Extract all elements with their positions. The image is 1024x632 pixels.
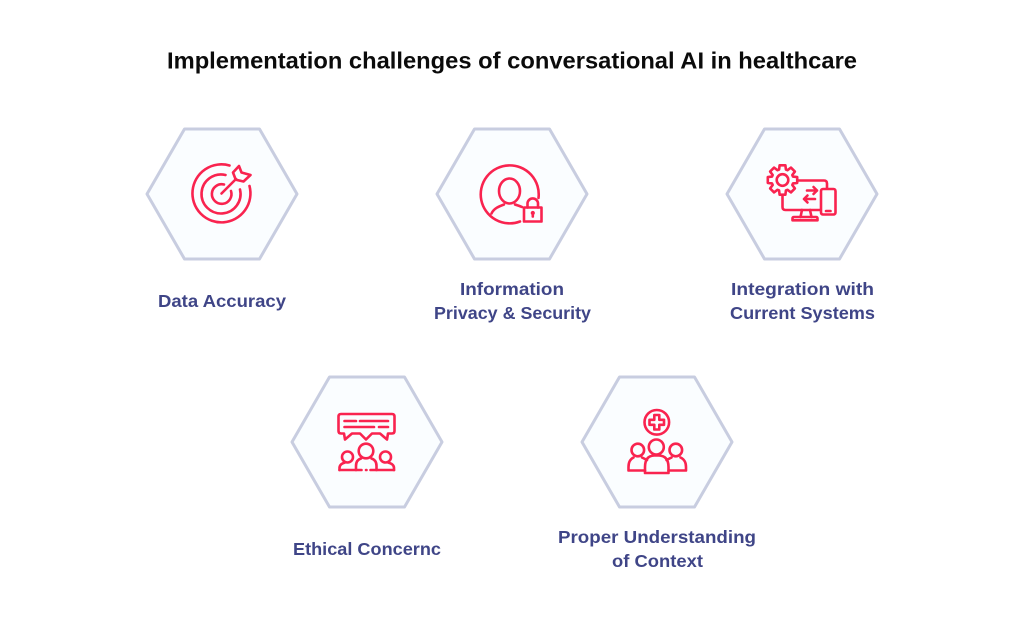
hexagon: Integration with Current Systems: [727, 129, 877, 259]
icon: gear, monitor and phone: [768, 165, 836, 220]
label: Information Privacy & Security: Privacy & Security: [434, 303, 591, 323]
label: Information Privacy & Security: [434, 279, 591, 323]
label: Integration with Current Systems: Integration with: [731, 279, 874, 299]
icon: medical cross above group: [628, 410, 686, 473]
label: Proper Understanding of Context: [558, 527, 756, 571]
panel: Proper Understanding of Context: [558, 377, 756, 571]
icon: group with speech bubble: [338, 414, 394, 470]
hexagon: Information Privacy & Security: [437, 129, 587, 259]
panel: Integration with Current Systems: [727, 129, 877, 323]
hexagon: Proper Understanding of Context: [582, 377, 732, 507]
label: Data Accuracy: Data Accuracy: [158, 291, 286, 311]
label: Proper Understanding of Context: Proper Understanding: [558, 527, 756, 547]
icon: target with arrow: [192, 164, 250, 222]
label: Ethical Concernc: Ethical Concernc: [293, 539, 441, 559]
hexagon: Ethical Concernc: [292, 377, 442, 507]
panel: Information Privacy & Security: [434, 129, 591, 323]
panel: Data Accuracy: [147, 129, 297, 311]
title: Implementation challenges of conversational AI in healthcare: [167, 48, 857, 74]
label: Integration with Current Systems: Current Systems: [730, 303, 875, 323]
label: Information Privacy & Security: Information: [460, 279, 564, 299]
icon: user with padlock: [481, 165, 542, 223]
label: Proper Understanding of Context: of Context: [612, 551, 703, 571]
label: Integration with Current Systems: [730, 279, 875, 323]
panel: Ethical Concernc: [292, 377, 442, 559]
hexagon: Data Accuracy: [147, 129, 297, 259]
